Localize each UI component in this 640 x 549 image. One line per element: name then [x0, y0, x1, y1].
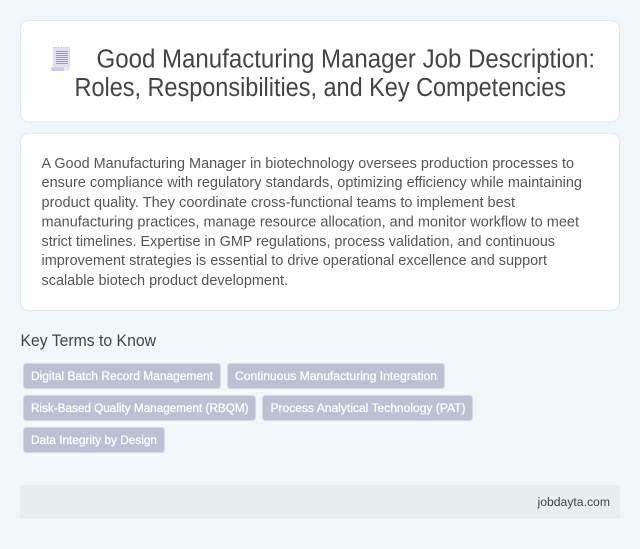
tag: continuous manufacturing: [228, 364, 444, 388]
tag: data integrity: [24, 428, 164, 452]
tag: digital batch record: Digital Batch Record Management: [31, 369, 214, 383]
text block: description: [42, 156, 582, 289]
tag: PAT: Process Analytical Technology (PAT): [270, 401, 466, 415]
tag: digital batch record: [24, 364, 220, 388]
panel: title card: [20, 20, 620, 122]
text block: description: manufacturing practices, manage resource allocation, and monitor workflow to meet: [42, 214, 579, 230]
tag: RBQM: Risk-Based Quality Management (RBQM): [31, 401, 248, 415]
panel: description card: [20, 134, 620, 310]
text block: description: improvement strategies is essential to drive operational excellence and support: [42, 253, 547, 269]
text block: description: ensure compliance with regulatory standards, optimizing efficiency while maintaining: [42, 175, 582, 191]
tag group: key terms: [24, 364, 472, 452]
footer: jobdayta.com: [536, 495, 610, 509]
title: Roles, Responsibilities, and Key Competencies: [74, 74, 566, 102]
tag: continuous manufacturing: Continuous Manufacturing Integration: [235, 369, 437, 383]
footer: [20, 485, 620, 519]
text block: description: scalable biotech product development.: [42, 273, 288, 289]
tag: data integrity: Data Integrity by Design: [31, 433, 157, 447]
heading: key terms: Key Terms to Know: [20, 332, 156, 350]
text block: description: product quality. They coordinate cross-functional teams to implement best: [42, 195, 515, 211]
tag: RBQM: [24, 396, 256, 420]
tag: PAT: [262, 396, 472, 420]
title: [74, 46, 595, 102]
text block: description: strict timelines. Expertise in GMP regulations, process validation, and continuous: [42, 234, 555, 250]
icon: document receipt: [51, 48, 70, 71]
title: Good Manufacturing Manager Job Description:: [96, 46, 595, 74]
text block: description: A Good Manufacturing Manager in biotechnology oversees production processes to: [42, 156, 574, 172]
